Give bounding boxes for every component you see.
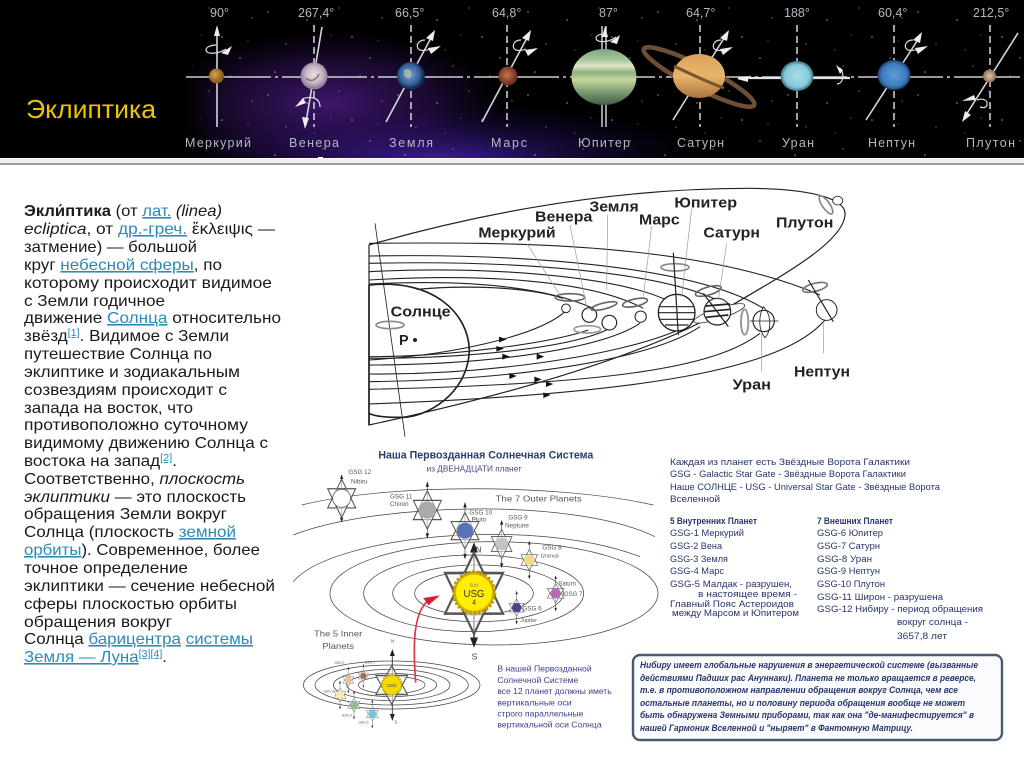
planet: Uranus: Уран <box>782 136 814 150</box>
planet: Uranus: 188° <box>784 6 810 20</box>
callout: Nibiru note: быть обнаружена Земными приборами, так как она "де-манифестируется" в <box>640 710 974 721</box>
inner solar system <box>303 639 480 728</box>
planet: Saturn: Сатурн <box>677 136 724 150</box>
planet: Jupiter <box>572 6 636 150</box>
diagram: primordial solar system of twelve planets <box>293 449 658 729</box>
text block: ecliptic definition: [2] <box>160 453 172 464</box>
planet: Jupiter: Юпитер <box>578 136 630 150</box>
planet: Pluto <box>962 6 1018 150</box>
outer planet: GSG 6 Jupiter: Jupiter <box>520 618 537 624</box>
group label: outer planets: The 7 Outer Planets <box>496 494 582 504</box>
inner solar system: S <box>394 719 397 724</box>
legend: inner planets: GSG-2 Вена <box>670 541 723 552</box>
text block: ecliptic definition: обращения Земли вокруг <box>24 506 227 523</box>
legend: outer planets <box>817 516 983 642</box>
legend: inner planets: 5 Внутренних Планет <box>670 516 757 527</box>
text block: ecliptic definition: Экли́птика (от лат. (linea) <box>24 203 222 220</box>
outer planet: GSG 9 Neptune: GSG 9 <box>508 514 528 521</box>
planet: Mercury: Меркурий <box>185 136 251 150</box>
planet: Earth <box>386 6 441 150</box>
diagram: planetary orbits and ecliptic <box>369 188 850 437</box>
outer planet: GSG 7 Saturn: Saturn <box>558 582 576 588</box>
legend: outer planets: GSG-8 Уран <box>817 554 872 565</box>
legend: inner planets: Главный Пояс Астероидов <box>670 599 794 610</box>
legend: outer planets: 7 Внешних Планет <box>817 516 893 527</box>
text block: ecliptic definition: сферы плоскостью орбиты <box>24 596 237 613</box>
legend intro: Вселенной <box>670 494 720 505</box>
planet labels: Венера <box>535 209 593 225</box>
text block: ecliptic definition: созвездиям происходит с <box>24 382 227 399</box>
legend: outer planets: GSG-10 Плутон <box>817 579 885 590</box>
legend intro <box>670 457 941 505</box>
outer planet: GSG 12 Nibiru: GSG 12 <box>348 469 372 476</box>
planet labels <box>391 195 850 393</box>
text block: ecliptic definition: точное определение <box>24 560 188 577</box>
legend: inner planets: GSG-3 Земля <box>670 554 728 565</box>
planet: Mercury <box>185 6 251 150</box>
outer orbits <box>293 489 658 645</box>
legend: inner planets: GSG-5 Малдак - разрушен, <box>670 579 792 590</box>
text block: ecliptic definition: орбиты). Современное, более <box>24 542 260 559</box>
planet labels: Юпитер <box>674 195 737 211</box>
planet labels: Солнце <box>391 304 451 320</box>
group label: inner planets <box>314 629 362 651</box>
planet: Neptune: 60,4° <box>878 6 907 20</box>
inner solar system: USG <box>387 683 397 688</box>
planet: Neptune: Нептун <box>868 136 915 150</box>
planet: Mercury: 90° <box>210 6 229 20</box>
legend intro: Наше СОЛНЦЕ - USG - Universal Star Gate - Звёздные Ворота <box>670 482 941 493</box>
central Sun: USG 4: USG <box>464 589 484 600</box>
text block: ecliptic definition: [1] <box>68 328 80 339</box>
planet: Saturn: 64,7° <box>686 6 715 20</box>
inner solar system: GSG 2 <box>334 661 345 665</box>
inner solar system: GSG 5 <box>358 720 369 724</box>
planet labels: Сатурн <box>703 225 760 241</box>
legend: outer planets: 3657,8 лет <box>897 631 948 642</box>
text block: ecliptic definition: звёзд <box>24 328 65 345</box>
group label: inner planets: The 5 Inner <box>314 629 362 639</box>
legend: outer planets: GSG-9 Нептун <box>817 566 880 577</box>
note: vertical axes: строго параллельные <box>497 708 584 718</box>
legend: outer planets: GSG-6 Юпитер <box>817 528 883 539</box>
planet: Earth: Земля <box>389 136 433 150</box>
legend: outer planets: GSG-11 Широн - разрушена <box>817 592 944 603</box>
central Sun: USG 4: S <box>472 651 478 661</box>
planet labels: Плутон <box>776 215 833 231</box>
text block: ecliptic definition: . <box>172 453 177 470</box>
outer planet: GSG 7 Saturn: GSG 7 <box>564 592 583 598</box>
outer planet: GSG 6 Jupiter: GSG 6 <box>522 605 542 612</box>
outer planet: GSG 11 Chiron: Chiron <box>390 501 409 508</box>
text block: ecliptic definition: с Земли годичное <box>24 293 165 310</box>
outer planet: GSG 8 Uranus: Uranus <box>541 554 559 560</box>
text block: ecliptic definition: видимому движению Солнца с <box>24 435 268 452</box>
planet labels: Марс <box>639 213 680 229</box>
outer planet: GSG 11 Chiron: GSG 11 <box>390 493 413 500</box>
planet labels: Нептун <box>794 365 850 381</box>
diagram title: Наша Первозданная Солнечная Система <box>378 449 593 461</box>
text block: ecliptic definition: Солнца (плоскость земной <box>24 524 236 541</box>
central Sun: USG 4: 4 <box>472 597 476 606</box>
inner solar system: GSG 4 <box>342 714 352 718</box>
note: vertical axes: В нашей Первозданной <box>497 663 592 673</box>
planet: Saturn <box>639 6 759 150</box>
outer planet: GSG 9 Neptune: Neptune <box>505 522 529 529</box>
text block: ecliptic definition: эклиптике и зодиакальным <box>24 364 240 381</box>
outer planet: GSG 8 Uranus <box>521 541 562 579</box>
planet labels: Меркурий <box>478 225 556 241</box>
text block: ecliptic definition: обращения вокруг <box>24 614 172 631</box>
legend intro: Каждая из планет есть Звёздные Ворота Галактики <box>670 457 910 468</box>
text block: ecliptic definition: эклиптики — сечение небесной <box>24 578 275 595</box>
planet labels: Уран <box>733 377 771 393</box>
planet: Venus <box>289 6 339 150</box>
outer planet: GSG 12 Nibiru: Nibiru <box>351 478 368 485</box>
planet: Venus: Венера <box>289 136 339 150</box>
planetary orbits <box>369 243 825 404</box>
planet: Neptune <box>866 6 928 150</box>
text block: ecliptic definition: Солнца барицентра системы <box>24 631 253 648</box>
planet: Uranus <box>737 6 850 150</box>
text block: ecliptic definition: [3][4] <box>139 649 163 660</box>
callout: Nibiru note: т.е. в противоположном направлении обращения вокруг Солнца, чем все <box>640 685 959 696</box>
note: vertical axes <box>497 663 612 729</box>
text block: ecliptic definition: движение Солнца относительно <box>24 310 281 327</box>
title: Эклиптика <box>26 94 157 124</box>
planet gate legend <box>670 457 983 642</box>
text block: ecliptic definition: которому происходит видимое <box>24 275 272 292</box>
outer planet: GSG 9 Neptune <box>491 514 529 568</box>
legend intro: GSG - Galactic Star Gate - Звёздные Ворота Галактики <box>670 469 906 480</box>
note: vertical axes: вертикальные оси <box>497 697 572 707</box>
text block: ecliptic definition: эклиптики — это плоскость <box>24 489 246 506</box>
central Sun: USG 4 <box>445 542 503 661</box>
outer planet: GSG 6 Jupiter <box>509 591 542 624</box>
outer planet: GSG 10 Pluto: GSG 10 <box>469 509 493 516</box>
inner solar system: GSG 1 <box>365 660 375 664</box>
text block: ecliptic definition: противоположно суточному <box>24 417 248 434</box>
planet labels: Земля <box>589 200 639 216</box>
tilted axis <box>375 223 405 437</box>
group label: inner planets: Planets <box>322 641 355 651</box>
text block: ecliptic definition: путешествие Солнца по <box>24 346 212 363</box>
note: vertical axes: вертикальной оси Солнца <box>497 719 602 729</box>
orbit of Pluto <box>369 188 845 425</box>
planet: Jupiter: 87° <box>599 6 618 20</box>
planet: Mars: Марс <box>491 136 527 150</box>
text block: ecliptic definition: Соответственно, плоскость <box>24 471 245 488</box>
header banner <box>0 0 1024 165</box>
note: vertical axes: Солнечной Системе <box>497 675 579 685</box>
outer planet: GSG 11 Chiron <box>390 481 441 539</box>
legend: inner planets: GSG-4 Марс <box>670 566 724 577</box>
legend: inner planets: в настоящее время - <box>698 589 797 600</box>
outer planet: GSG 10 Pluto <box>451 502 493 559</box>
outer planet: GSG 7 Saturn <box>547 575 583 611</box>
outer planet: GSG 10 Pluto: Pluto <box>472 517 487 524</box>
callout: Nibiru note: нашей Гармоник Вселенной и "ныряет" в Фантомную Матрицу. <box>640 723 913 734</box>
text block: ecliptic definition: круг небесной сферы , по <box>24 257 222 274</box>
central Sun: USG 4: SUN <box>469 583 479 588</box>
inner solar system: N <box>391 639 394 644</box>
planet: Pluto: 212,5° <box>973 6 1009 20</box>
inner solar system: GSG 3 <box>323 689 334 693</box>
callout: Nibiru note: действиями Падших рас Ануннаки). Планета не только вращается в реверсе, <box>640 673 976 684</box>
planets with orbital rings <box>376 194 843 338</box>
note: vertical axes: все 12 планет должны иметь <box>497 686 612 696</box>
text block: ecliptic definition: Земля — Луна <box>24 649 139 666</box>
central Sun: USG 4: N <box>476 545 482 554</box>
text block: ecliptic definition: . <box>162 649 167 666</box>
callout: Nibiru note <box>633 655 1002 740</box>
legend: inner planets: между Марсом и Юпитером <box>672 608 799 619</box>
text block: ecliptic definition: востока на запад <box>24 453 150 470</box>
diagram subtitle: из ДВЕНАДЦАТИ планет <box>427 464 522 474</box>
text block: ecliptic definition: . Видимое с Земли <box>80 328 229 345</box>
text block: ecliptic definition: запада на восток, что <box>24 400 193 417</box>
planet labels: P <box>399 333 409 349</box>
callout: Nibiru note: остальные планеты, но и половину периода обращения вообще не может <box>640 698 965 709</box>
pointer lines <box>527 208 823 372</box>
legend: inner planets: GSG-1 Меркурий <box>670 528 744 539</box>
legend: outer planets: вокруг солнца - <box>897 617 968 628</box>
ecliptic line <box>186 76 1020 78</box>
text block: ecliptic definition: ecliptica , от др.-греч. ἔκλειψις — <box>24 221 275 238</box>
legend: outer planets: GSG-7 Сатурн <box>817 541 880 552</box>
planet: Pluto: Плутон <box>966 136 1015 150</box>
Sun disc <box>369 284 469 425</box>
callout: Nibiru note: Нибиру имеет глобальные нарушения в энергетической системе (вызванные <box>640 660 979 671</box>
planet: Mars <box>482 6 538 150</box>
red arrow from inner to outer system <box>414 595 440 683</box>
planet: Venus: 267,4° <box>298 6 334 20</box>
legend: inner planets <box>670 516 799 619</box>
planet: Earth: 66,5° <box>395 6 424 20</box>
direction arrows <box>496 337 553 398</box>
outer planet: GSG 12 Nibiru <box>328 469 372 522</box>
text block: ecliptic definition <box>24 203 281 666</box>
outer planet: GSG 8 Uranus: GSG 8 <box>542 544 562 551</box>
planet: Mars: 64,8° <box>492 6 521 20</box>
legend: outer planets: GSG-12 Нибиру - период обращения <box>817 604 983 615</box>
text block: ecliptic definition: затмение) — большой <box>24 239 197 256</box>
